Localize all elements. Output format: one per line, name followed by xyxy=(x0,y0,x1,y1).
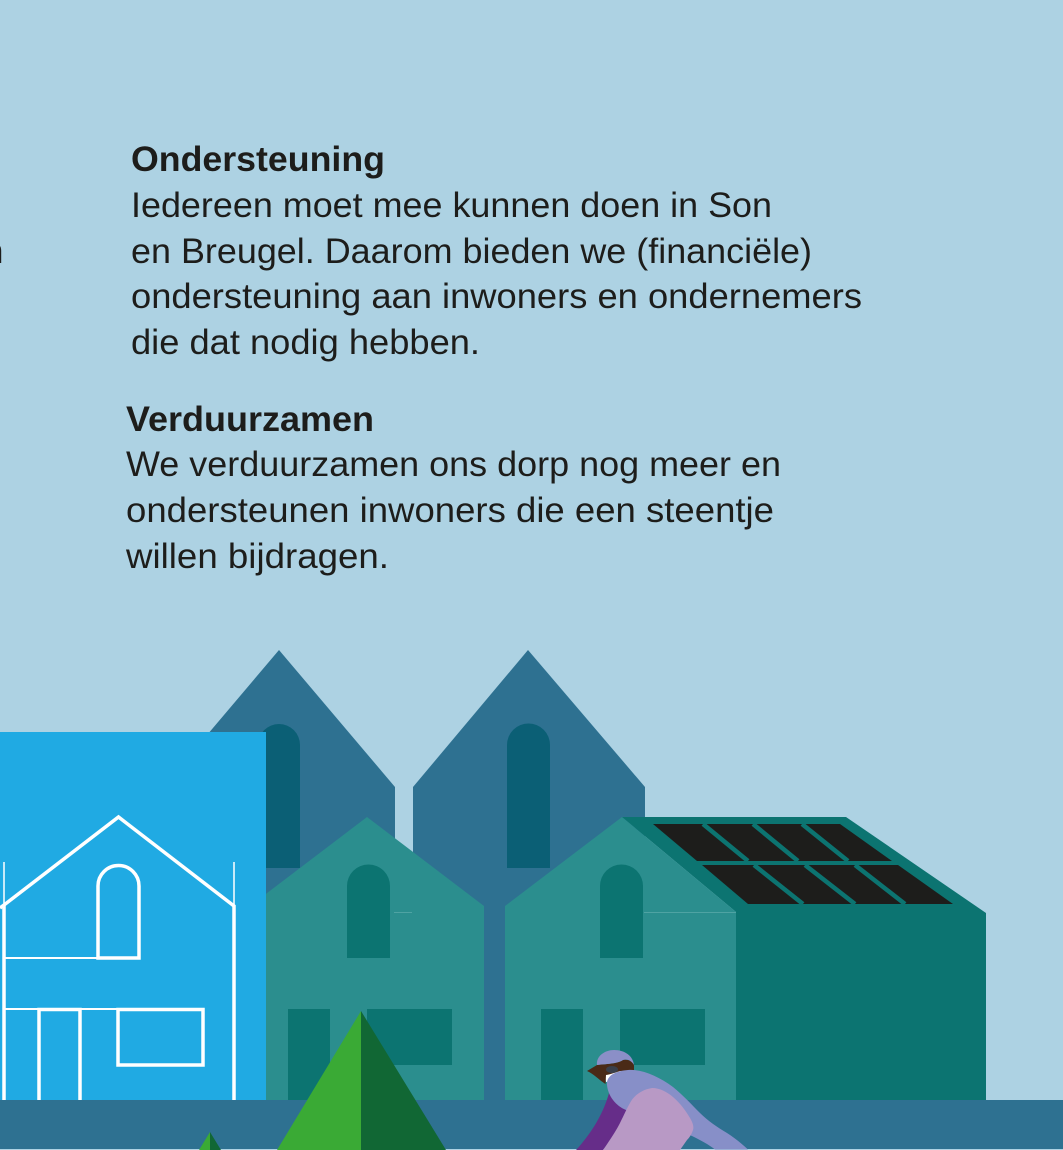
body line 1: Iedereen moet mee kunnen doen in Son xyxy=(131,186,772,225)
solar panels xyxy=(653,824,953,904)
white cheek xyxy=(604,1068,632,1082)
wing xyxy=(603,1088,693,1150)
heading: Verduurzamen: Verduurzamen xyxy=(126,400,374,439)
body line 3: ondersteuning aan inwoners en ondernemers xyxy=(131,277,862,316)
roof and side wall xyxy=(622,817,986,1100)
brown mask and beak xyxy=(587,1060,634,1084)
body line 4: die dat nodig hebben. xyxy=(131,323,480,362)
bird xyxy=(576,1050,748,1150)
purple breast xyxy=(576,1093,632,1150)
text block: Ondersteuning xyxy=(131,140,862,362)
body line 3: willen bijdragen. xyxy=(125,537,389,576)
back house right xyxy=(413,650,645,1100)
eye xyxy=(606,1066,618,1073)
teal house with solar roof xyxy=(505,817,986,1100)
body and tail xyxy=(607,1070,748,1150)
blue house with white outline xyxy=(0,732,266,1100)
small tree xyxy=(199,1132,221,1150)
back house left xyxy=(163,650,395,1100)
body line 2: en Breugel. Daarom bieden we (financiële) xyxy=(131,232,812,271)
gabled facade xyxy=(505,817,736,1100)
head cap xyxy=(597,1050,634,1065)
large tree xyxy=(277,1011,446,1150)
road xyxy=(0,1100,1063,1149)
text block: Verduurzamen xyxy=(125,400,781,576)
heading: Ondersteuning: Ondersteuning xyxy=(131,140,385,179)
body line 2: ondersteunen inwoners die een steentje xyxy=(126,491,774,530)
body line 1: We verduurzamen ons dorp nog meer en xyxy=(126,445,781,484)
green house middle xyxy=(250,817,484,1100)
